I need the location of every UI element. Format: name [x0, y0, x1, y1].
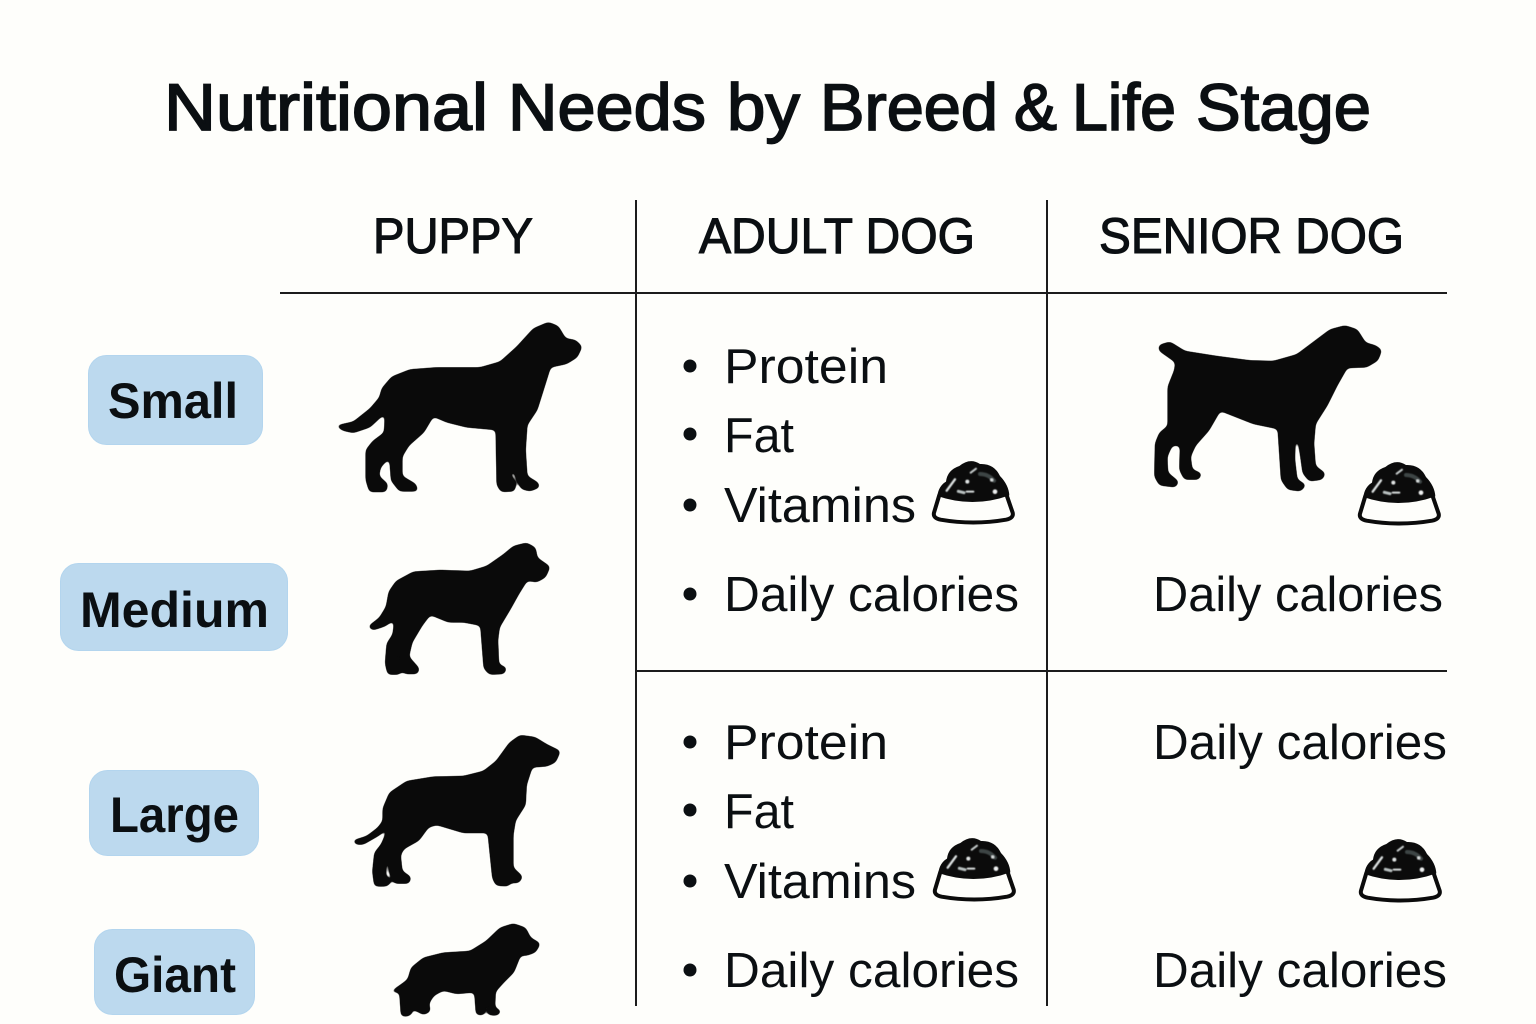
badge: medium: Medium: [80, 582, 269, 638]
title: by: [727, 70, 800, 144]
badge: medium: [60, 564, 288, 650]
icon: large breed puppy silhouette: [352, 735, 561, 886]
text: senior daily calories, row two: Daily calories: [1153, 716, 1447, 770]
text: senior daily calories, row three: Daily calories: [1153, 944, 1447, 998]
icon: giant breed puppy silhouette: [389, 923, 541, 1016]
panel: adult dog, lower nutrient list: Vitamins: [724, 855, 916, 909]
icon: small breed puppy silhouette: [335, 322, 582, 492]
title: Needs: [508, 70, 706, 144]
icon: medium breed puppy silhouette: [368, 543, 550, 675]
panel: adult dog, upper nutrient list: Vitamins: [724, 479, 916, 533]
text: senior daily calories, row one: Daily calories: [1153, 568, 1443, 622]
panel: adult dog, upper nutrient list: Fat: [724, 409, 794, 463]
badge: giant: Giant: [114, 947, 236, 1003]
title: &: [1014, 70, 1057, 144]
badge: large: [90, 770, 258, 856]
title: Nutritional: [164, 70, 488, 144]
icon: food bowl, senior lower: [1361, 839, 1440, 900]
panel: adult dog, lower nutrient list: Fat: [724, 785, 794, 839]
panel: adult dog, upper nutrient list: Daily calories: [724, 568, 1019, 622]
icon: food bowl, senior upper: [1360, 462, 1439, 523]
title: Life: [1072, 70, 1176, 144]
icon: food bowl, adult lower: [935, 838, 1014, 899]
column heading: puppy: PUPPY: [373, 208, 533, 264]
table grid lines: [280, 200, 1447, 1006]
panel: adult dog, lower nutrient list: [684, 716, 1019, 998]
icon: senior dog silhouette: [1154, 325, 1382, 491]
badge: small: Small: [108, 373, 238, 429]
badge: small: [88, 356, 262, 444]
icon: food bowl, adult upper: [934, 461, 1013, 522]
panel: adult dog, lower nutrient list: Protein: [724, 716, 888, 770]
column heading: senior dog: SENIOR DOG: [1099, 208, 1404, 264]
panel: adult dog, lower nutrient list: Daily calories: [724, 944, 1019, 998]
panel: adult dog, upper nutrient list: [684, 340, 1019, 622]
column heading: adult dog: ADULT DOG: [699, 208, 975, 264]
panel: adult dog, upper nutrient list: Protein: [724, 340, 888, 394]
title: Breed: [820, 70, 998, 144]
badge: large: Large: [110, 787, 239, 843]
badge: giant: [94, 930, 254, 1014]
title: Stage: [1196, 70, 1371, 144]
title: [164, 70, 1371, 144]
